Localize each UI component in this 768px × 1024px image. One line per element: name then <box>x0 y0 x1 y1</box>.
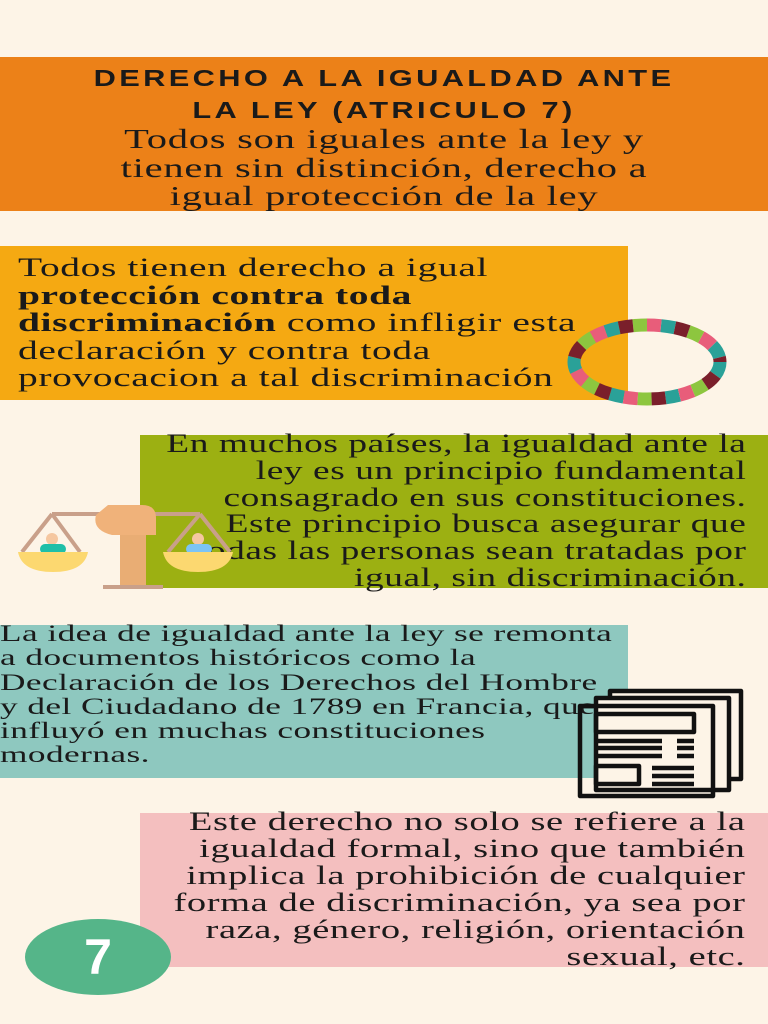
text block: forma de discriminación, ya sea por <box>174 888 746 917</box>
text block: raza, género, religión, orientación <box>206 915 746 944</box>
text block <box>18 252 576 392</box>
subtitle: tienen sin distinción, derecho a <box>121 152 647 182</box>
text block: consagrado en sus constituciones. <box>223 482 746 512</box>
text block: todas las personas sean tratadas por <box>195 535 746 565</box>
text block <box>166 428 746 592</box>
badge: number 7: 7 <box>84 929 112 985</box>
text block: Todos tienen derecho a igual <box>18 252 488 282</box>
text block: igualdad formal, sino que también <box>200 834 746 863</box>
text block: Este derecho no solo se refiere a la <box>189 807 746 836</box>
text block: modernas. <box>0 742 150 768</box>
panel: discrimination protection <box>0 246 628 400</box>
subtitle: igual protección de la ley <box>170 181 598 211</box>
panel: constitutions <box>140 435 768 588</box>
badge: number 7 <box>25 919 171 995</box>
text block: y del Ciudadano de 1789 en Francia, que <box>0 694 595 720</box>
text block <box>0 621 612 768</box>
text block: discriminación como infligir esta <box>18 307 576 337</box>
title: LA LEY (ATRICULO 7) <box>192 97 576 123</box>
panel: header <box>0 57 768 211</box>
subtitle <box>121 124 647 211</box>
title: DERECHO A LA IGUALDAD ANTE <box>94 65 674 91</box>
text block: declaración y contra toda <box>18 334 431 364</box>
title <box>94 65 674 123</box>
text block: La idea de igualdad ante la ley se remonta <box>0 621 612 647</box>
text block: En muchos países, la igualdad ante la <box>166 428 746 458</box>
text block: igual, sin discriminación. <box>354 562 746 592</box>
text block: Declaración de los Derechos del Hombre <box>0 670 598 696</box>
icon: newspaper <box>578 688 744 798</box>
text block: provocacion a tal discriminación <box>18 362 553 392</box>
icon: circle of people <box>568 318 726 406</box>
text block: protección contra toda <box>18 280 412 310</box>
subtitle: Todos son iguales ante la ley y <box>124 124 644 154</box>
text block: ley es un principio fundamental <box>255 455 746 485</box>
text block: implica la prohibición de cualquier <box>187 861 746 890</box>
icon: scales with fist <box>18 505 233 589</box>
panel: formal equality <box>140 813 768 967</box>
text block <box>174 807 746 971</box>
text block: Este principio busca asegurar que <box>225 508 746 538</box>
panel: history <box>0 625 628 778</box>
text block: a documentos históricos como la <box>0 645 476 671</box>
text block: influyó en muchas constituciones <box>0 718 485 744</box>
text block: sexual, etc. <box>567 942 746 971</box>
